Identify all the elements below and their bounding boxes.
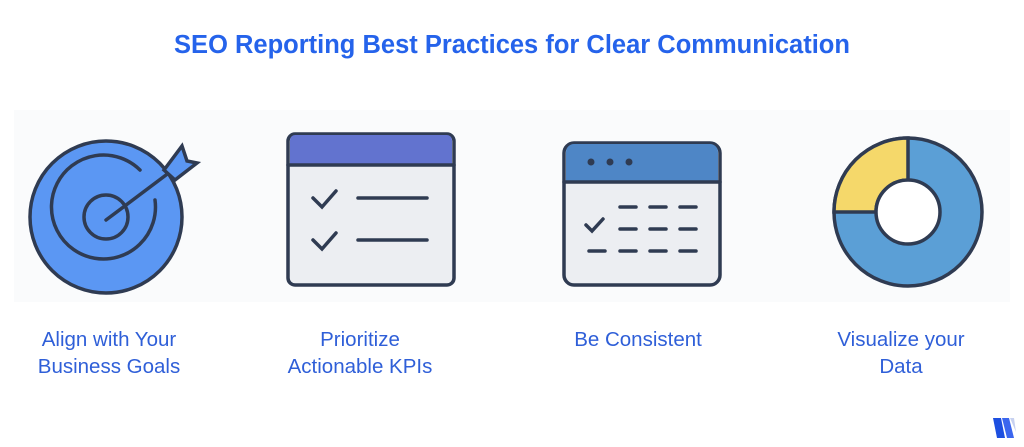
label 2: Prioritize bbox=[320, 328, 400, 351]
label 3: Be Consistent bbox=[574, 328, 702, 351]
icon: donut chart bbox=[834, 138, 982, 286]
title: SEO Reporting Best Practices for Clear Communication bbox=[174, 31, 850, 59]
label 4: Visualize your bbox=[837, 328, 965, 351]
icon: calendar bbox=[564, 143, 720, 285]
label 1: Business Goals bbox=[38, 355, 180, 378]
icon: logo bbox=[993, 418, 1016, 438]
label 1: Align with Your bbox=[42, 328, 176, 351]
label 1 bbox=[38, 328, 180, 378]
label 2: Actionable KPIs bbox=[288, 355, 432, 378]
icon: target bbox=[30, 141, 197, 293]
icon: checklist window bbox=[288, 134, 454, 285]
label 4: Data bbox=[879, 355, 923, 378]
label 4 bbox=[837, 328, 965, 378]
label 2 bbox=[288, 328, 432, 378]
